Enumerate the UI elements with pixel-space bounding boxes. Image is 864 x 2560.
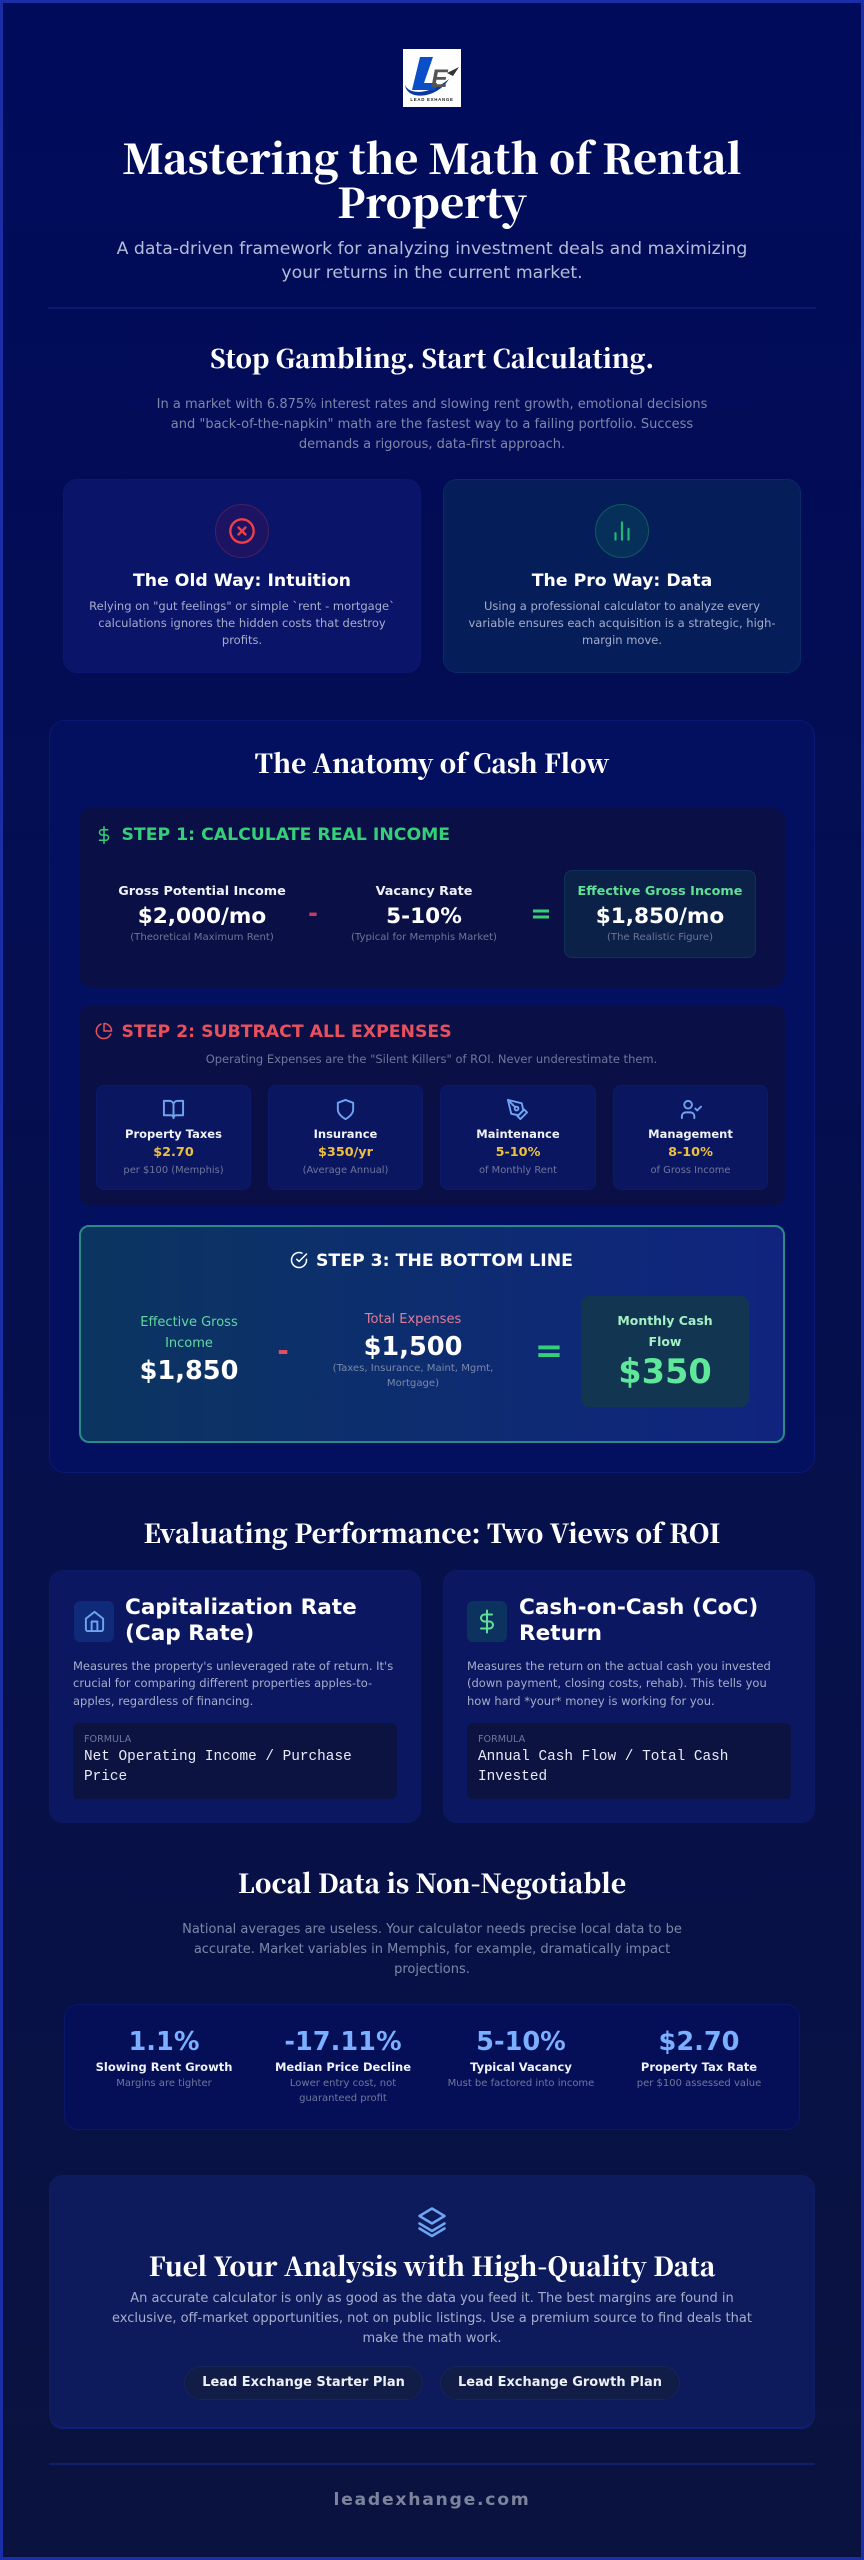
panel: pro way (443, 479, 801, 673)
pro way text (468, 599, 776, 647)
card: maintenance (440, 1085, 596, 1190)
management value: 8-10% (668, 1145, 713, 1160)
coc title: Return (519, 1621, 602, 1646)
cap rate text: apples, regardless of financing. (73, 1694, 253, 1708)
stat: price decline (275, 2027, 411, 2104)
cap rate title: Capitalization Rate (125, 1595, 357, 1620)
icon: home (74, 1601, 114, 1642)
stat: rent growth: 1.1% (128, 2027, 199, 2057)
vacancy rate: (Typical for Memphis Market) (351, 932, 497, 943)
property taxes value: $2.70 (153, 1145, 194, 1160)
button: growth plan (440, 2366, 680, 2400)
intro text (157, 397, 707, 452)
panel: step 1 (79, 808, 785, 987)
pro way text: variable ensures each acquisition is a strategic, high- (468, 616, 776, 630)
monthly cash flow result: Flow (649, 1334, 681, 1348)
step 1 heading: STEP 1: CALCULATE REAL INCOME (122, 825, 450, 845)
gross potential income: Gross Potential Income (118, 884, 286, 899)
local data text (182, 1922, 682, 1977)
panel: old way (63, 479, 421, 673)
effective gross income (564, 870, 756, 958)
logo: LEAD EXHANGE (410, 97, 454, 102)
insurance label: Insurance (314, 1127, 377, 1141)
effective gross income: Effective Gross Income (578, 884, 742, 899)
maintenance note: of Monthly Rent (479, 1165, 557, 1176)
gross potential income (118, 884, 286, 943)
button: growth plan: Lead Exchange Growth Plan (458, 2375, 662, 2390)
old way text: calculations ignores the hidden costs that destroy (98, 616, 386, 630)
heading: anatomy: The Anatomy of Cash Flow (255, 744, 609, 781)
cta heading: Fuel Your Analysis with High-Quality Data (149, 2247, 715, 2284)
icon: dollar (98, 826, 110, 844)
stat: rent growth: Margins are tighter (116, 2078, 212, 2089)
icon: pie chart (96, 1022, 112, 1040)
maintenance value: 5-10% (496, 1145, 540, 1160)
step 3 heading: STEP 3: THE BOTTOM LINE (316, 1251, 573, 1271)
total expenses (333, 1312, 493, 1388)
cap rate formula (73, 1723, 397, 1799)
stat: tax rate (637, 2027, 761, 2089)
property taxes label: Property Taxes (125, 1127, 222, 1141)
coc title (519, 1595, 758, 1646)
total expenses: (Taxes, Insurance, Maint, Mgmt, (333, 1363, 493, 1374)
pro way text: Using a professional calculator to analyze every (484, 599, 760, 613)
old way text (89, 599, 395, 647)
maintenance label: Maintenance (476, 1127, 560, 1141)
icon: bar chart (595, 504, 649, 558)
stat: price decline: Median Price Decline (275, 2060, 411, 2074)
title: Mastering the Math of Rental (122, 127, 742, 186)
stat: tax rate: Property Tax Rate (641, 2060, 757, 2074)
stat: price decline: -17.11% (284, 2027, 402, 2057)
effective gross income: (The Realistic Figure) (607, 932, 713, 943)
coc formula: Annual Cash Flow / Total Cash (478, 1749, 728, 1765)
equals operator: = (535, 1331, 563, 1371)
total expenses: Total Expenses (365, 1312, 461, 1327)
cap rate formula: Price (84, 1769, 127, 1785)
stat: tax rate: per $100 assessed value (637, 2078, 761, 2089)
panel: cash on cash (443, 1570, 815, 1823)
insurance value: $350/yr (318, 1145, 373, 1160)
title: Property (337, 170, 527, 230)
stat: rent growth: Slowing Rent Growth (96, 2060, 232, 2074)
pro way title: The Pro Way: Data (532, 571, 712, 591)
cap rate formula: Net Operating Income / Purchase (84, 1749, 352, 1765)
pro way text: margin move. (582, 633, 662, 647)
vacancy rate: Vacancy Rate (376, 884, 472, 899)
effective gross income total (140, 1315, 238, 1386)
button: starter plan (184, 2366, 423, 2400)
management label: Management (648, 1127, 733, 1141)
icon: shield (336, 1099, 354, 1120)
card: property taxes (96, 1085, 251, 1190)
card: management (613, 1085, 768, 1190)
coc text (467, 1659, 771, 1708)
cap rate text: Measures the property's unleveraged rate of return. It's (73, 1659, 393, 1673)
monthly cash flow result: Monthly Cash (617, 1313, 713, 1328)
cap rate title: (Cap Rate) (125, 1621, 254, 1646)
panel: call to action (49, 2175, 815, 2429)
total expenses: Mortgage) (387, 1378, 439, 1388)
panel: step 2 (79, 1005, 785, 1206)
icon: pen tool (506, 1098, 528, 1120)
heading: stop gambling: Stop Gambling. Start Calculating. (210, 340, 654, 376)
icon: dollar (467, 1601, 507, 1642)
cap rate text: crucial for comparing different properties apples-to- (73, 1676, 372, 1690)
subtitle: A data-driven framework for analyzing investment deals and maximizing (117, 239, 747, 259)
old way text: profits. (222, 633, 262, 647)
cta text (112, 2291, 752, 2346)
local data text: accurate. Market variables in Memphis, for example, dramatically impact (194, 1942, 670, 1957)
minus operator: - (277, 1334, 289, 1367)
stat: vacancy (448, 2027, 594, 2089)
cap rate formula: FORMULA (84, 1734, 131, 1745)
cta text: An accurate calculator is only as good as the data you feed it. The best margins are found in (130, 2291, 734, 2306)
icon: x circle (215, 504, 269, 558)
icon: book (162, 1100, 184, 1120)
footer: leadexhange.com (334, 2490, 530, 2510)
coc formula (467, 1723, 791, 1799)
gross potential income: $2,000/mo (138, 904, 266, 929)
cap rate text (73, 1659, 393, 1708)
stat: price decline: Lower entry cost, not (290, 2078, 396, 2089)
gross potential income: (Theoretical Maximum Rent) (130, 932, 274, 943)
coc formula: Invested (478, 1769, 547, 1785)
management note: of Gross Income (651, 1165, 730, 1176)
minus operator: - (308, 899, 318, 927)
icon: user check (680, 1100, 702, 1120)
vacancy rate (351, 884, 497, 943)
card: insurance (268, 1085, 423, 1190)
step 2 heading: STEP 2: SUBTRACT ALL EXPENSES (122, 1022, 452, 1042)
coc text: how hard *your* money is working for you. (467, 1694, 715, 1708)
panel: cap rate (49, 1570, 421, 1823)
cta text: exclusive, off-market opportunities, not on public listings. Use a premium source to find deals that (112, 2311, 752, 2326)
equals operator: = (530, 899, 552, 929)
cta text: make the math work. (362, 2331, 501, 2346)
panel: step 3 (79, 1225, 785, 1443)
intro text: and "back-of-the-napkin" math are the fastest way to a failing portfolio. Success (171, 417, 693, 432)
effective gross income total: Income (165, 1336, 213, 1350)
stat: vacancy: Must be factored into income (448, 2078, 594, 2089)
stat: vacancy: 5-10% (476, 2027, 566, 2057)
panel: local stats (64, 2004, 800, 2130)
cap rate title (125, 1595, 357, 1646)
heading: evaluating performance: Evaluating Performance: Two Views of ROI (143, 1514, 721, 1551)
stat: vacancy: Typical Vacancy (470, 2060, 572, 2074)
total expenses: $1,500 (364, 1332, 462, 1362)
intro text: demands a rigorous, data-first approach. (299, 437, 565, 452)
local data text: projections. (394, 1962, 470, 1977)
icon: layers (418, 2207, 446, 2238)
stat: rent growth (96, 2027, 232, 2089)
effective gross income total: $1,850 (140, 1356, 238, 1386)
step 2 text: Operating Expenses are the "Silent Killers" of ROI. Never underestimate them. (206, 1052, 657, 1066)
subtitle (116, 239, 747, 282)
panel: anatomy of cash flow (49, 720, 815, 1473)
logo (403, 49, 461, 107)
insurance note: (Average Annual) (303, 1165, 388, 1176)
property taxes note: per $100 (Memphis) (123, 1165, 224, 1176)
monthly cash flow result (581, 1296, 749, 1407)
coc text: Measures the return on the actual cash you invested (467, 1659, 771, 1673)
heading: local data: Local Data is Non-Negotiable (238, 1864, 626, 1901)
subtitle: your returns in the current market. (281, 262, 583, 282)
icon: check circle (290, 1252, 308, 1268)
button: starter plan: Lead Exchange Starter Plan (202, 2375, 405, 2390)
effective gross income total: Effective Gross (140, 1315, 238, 1330)
local data text: National averages are useless. Your calculator needs precise local data to be (182, 1922, 682, 1937)
vacancy rate: 5-10% (386, 904, 462, 929)
intro text: In a market with 6.875% interest rates and slowing rent growth, emotional decisions (157, 397, 707, 412)
monthly cash flow result: $350 (618, 1352, 712, 1391)
logo: E (431, 65, 449, 93)
stat: price decline: guaranteed profit (299, 2093, 387, 2104)
old way text: Relying on "gut feelings" or simple `rent - mortgage` (89, 599, 395, 613)
coc formula: FORMULA (478, 1734, 525, 1745)
coc text: (down payment, closing costs, rehab). This tells you (467, 1676, 767, 1690)
coc title: Cash-on-Cash (CoC) (519, 1595, 758, 1620)
title (122, 127, 742, 230)
old way title: The Old Way: Intuition (133, 571, 351, 591)
stat: tax rate: $2.70 (659, 2027, 739, 2057)
effective gross income: $1,850/mo (596, 904, 724, 929)
